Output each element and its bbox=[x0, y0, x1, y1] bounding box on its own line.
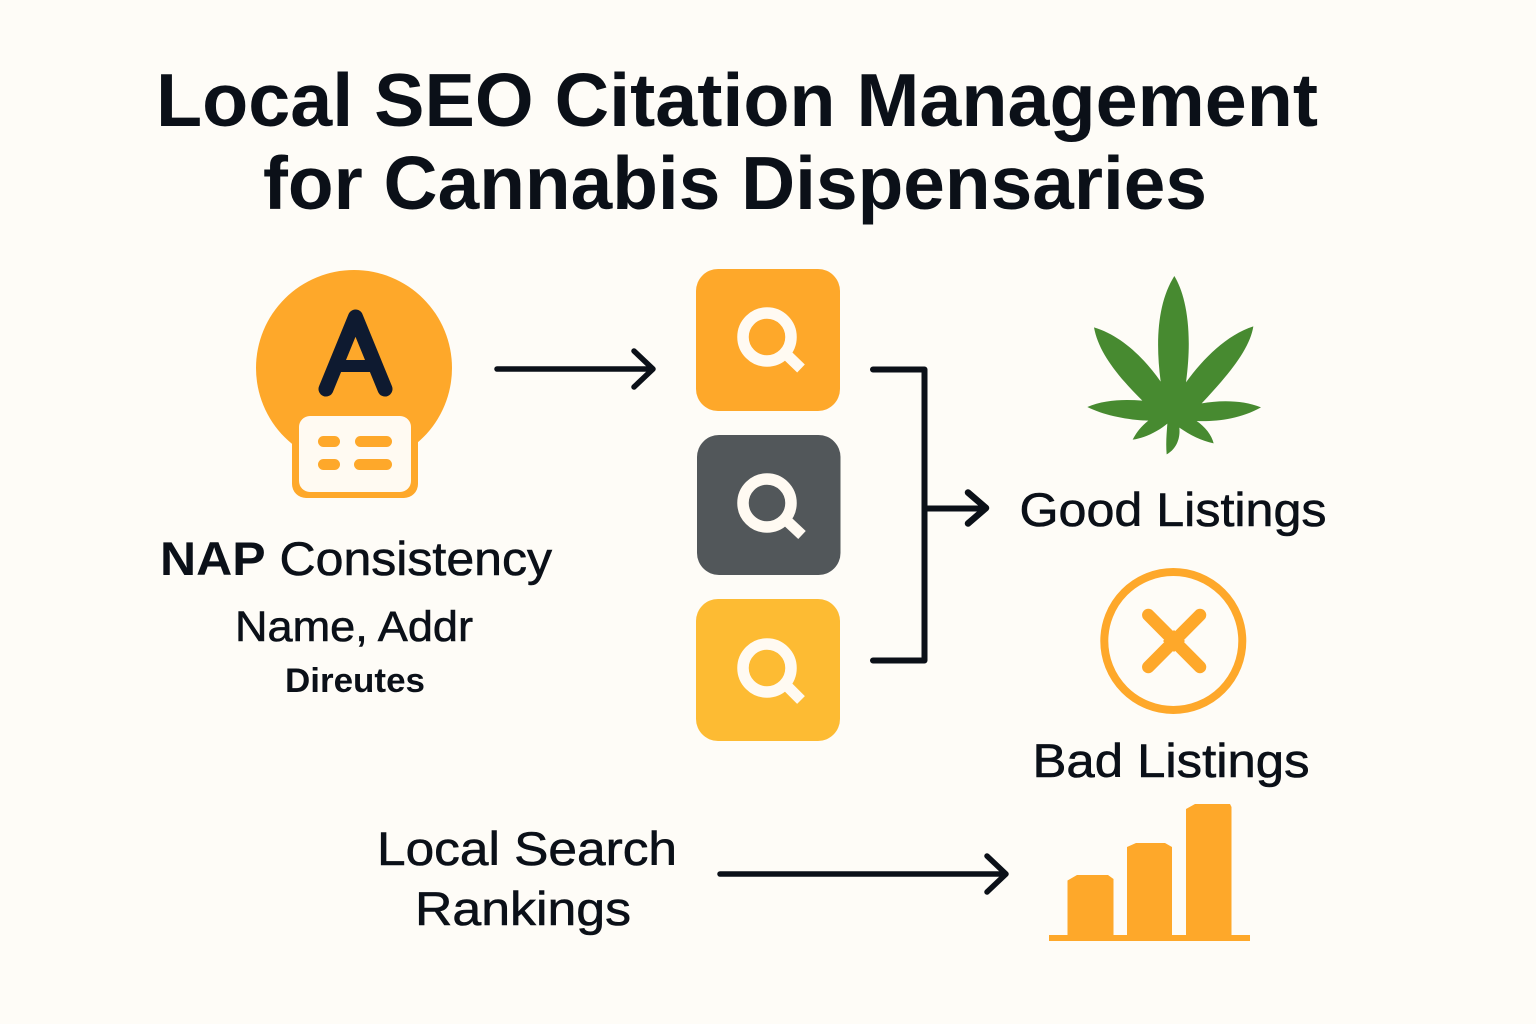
title: Local SEO Citation Management bbox=[156, 58, 1318, 142]
title bbox=[156, 58, 1318, 225]
icon: yellow search tile bbox=[696, 599, 840, 741]
icon: grey search tile bbox=[697, 435, 840, 575]
icon: NAP badge bbox=[256, 270, 452, 498]
bar chart bbox=[1049, 804, 1250, 941]
icon: cannabis leaf bbox=[1087, 276, 1261, 454]
icon: orange search tile bbox=[696, 269, 840, 411]
label: bad listings: Bad Listings bbox=[1032, 734, 1310, 787]
label: local search rankings: Local Search bbox=[377, 822, 677, 875]
NAP text block: Name, Addr bbox=[235, 603, 473, 651]
NAP text block: Direutes bbox=[285, 662, 425, 700]
icon: bad listing x bbox=[1104, 572, 1242, 710]
label: local search rankings bbox=[377, 822, 677, 935]
title: for Cannabis Dispensaries bbox=[263, 141, 1207, 225]
bracket arrow: directories to listings bbox=[873, 370, 986, 660]
NAP text block bbox=[160, 532, 553, 700]
label: local search rankings: Rankings bbox=[415, 882, 631, 935]
label: good listings: Good Listings bbox=[1020, 483, 1326, 536]
arrow: rankings to chart bbox=[720, 856, 1006, 892]
NAP text block: NAP Consistency bbox=[160, 532, 553, 585]
arrow: NAP to directories bbox=[497, 351, 653, 387]
